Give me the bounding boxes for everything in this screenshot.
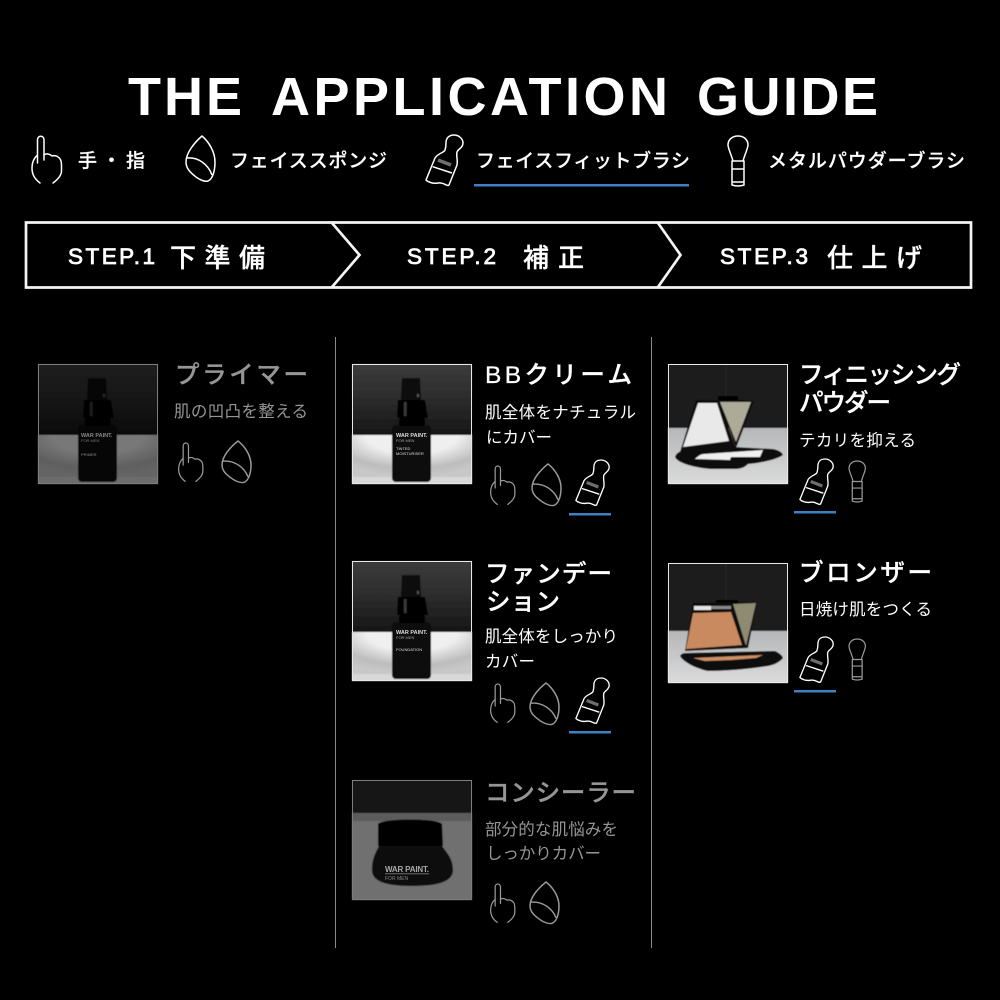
product photo: BB cream: WAR PAINT. <box>396 433 428 439</box>
panel: foundation: カバー <box>485 653 535 671</box>
icon: sponge <box>532 464 561 506</box>
panel: foundation <box>352 559 618 734</box>
product photo: primer: WAR PAINT. <box>81 433 113 439</box>
description: primer: 肌の凹凸を整える <box>174 402 308 421</box>
highlight underline <box>794 511 836 514</box>
tool legend <box>32 135 965 186</box>
icon: face fit brush <box>576 678 609 723</box>
panel: BB cream <box>352 362 636 516</box>
heading: finishing powder: フィニッシング <box>799 361 961 389</box>
panel: primer <box>38 361 308 484</box>
product photo: finishing powder <box>668 364 788 484</box>
highlight underline <box>569 731 611 734</box>
description: bronzer: 日焼け肌をつくる <box>799 600 932 619</box>
product photo: foundation <box>352 561 472 681</box>
icon: face fit brush <box>800 637 833 682</box>
icon: sponge <box>186 136 215 181</box>
product photo: BB cream: MOISTURISER <box>396 451 424 456</box>
product photo: foundation: FOR MEN <box>396 635 415 640</box>
description: finishing powder: テカリを抑える <box>799 431 916 450</box>
legend label: fingers: 手・指 <box>78 150 145 172</box>
panel: finishing powder: パウダー <box>799 389 891 417</box>
step bar <box>26 222 971 288</box>
title: GUIDE <box>697 67 878 127</box>
description: foundation: 肌全体をしっかり <box>485 627 618 646</box>
step 3 name: 仕上げ <box>827 243 922 273</box>
product photo: BB cream <box>352 364 472 484</box>
panel: concealer: しっかりカバー <box>486 845 601 863</box>
product photo: foundation: WAR PAINT. <box>396 630 428 636</box>
product photo: primer <box>38 364 158 484</box>
product photo: concealer: WAR PAINT. <box>385 865 429 874</box>
legend label: metal powder brush: メタルパウダーブラシ <box>768 149 965 172</box>
icon: hand <box>179 443 203 481</box>
product photo: BB cream: TINTED <box>396 446 411 451</box>
product photo: foundation: FOUNDATION <box>396 647 422 652</box>
panel: bronzer <box>668 559 932 692</box>
panel: finishing powder <box>668 361 961 514</box>
title <box>128 67 878 127</box>
step 2 name: 補正 <box>523 243 584 273</box>
step 1 name: 下準備 <box>170 243 265 273</box>
heading: primer: プライマー <box>175 361 308 389</box>
title: APPLICATION <box>271 67 668 127</box>
description: BB cream: 肌全体をナチュラル <box>485 403 636 422</box>
legend label: face fit brush: フェイスフィットブラシ <box>476 149 690 172</box>
highlight underline <box>569 513 611 516</box>
step 1 label: STEP.1 <box>68 244 155 269</box>
step 2 label: STEP.2 <box>407 244 496 269</box>
panel: concealer <box>352 780 636 924</box>
icon: metal powder brush <box>728 136 748 186</box>
heading: bronzer: ブロンザー <box>799 559 932 587</box>
icon: sponge <box>530 882 559 924</box>
icon: hand <box>491 884 515 922</box>
icon: face fit brush <box>426 135 463 185</box>
legend highlight underline <box>474 184 689 186</box>
step 3 label: STEP.3 <box>720 244 808 269</box>
description: concealer: 部分的な肌悩みを <box>485 820 618 839</box>
product photo: concealer <box>352 780 472 900</box>
icon: hand <box>491 466 515 504</box>
heading: foundation: ファンデー <box>485 559 612 588</box>
icon: sponge <box>530 683 559 725</box>
product photo: bronzer <box>668 563 788 683</box>
icon: metal powder brush <box>849 461 865 502</box>
icon: face fit brush <box>576 460 609 505</box>
product photo: BB cream: FOR MEN <box>396 438 415 443</box>
panel: foundation: ション <box>486 589 560 616</box>
icon: hand <box>32 136 62 183</box>
product photo: primer: FOR MEN <box>81 438 100 443</box>
highlight underline <box>794 690 836 692</box>
heading: BB cream: BBクリーム <box>485 362 632 389</box>
step bar frame with chevrons <box>26 222 971 288</box>
product photo: primer: PRIMER <box>81 452 97 457</box>
icon: sponge <box>222 441 251 483</box>
heading: concealer: コンシーラー <box>485 780 636 807</box>
product photo: concealer: FOR MEN <box>385 876 408 882</box>
icon: metal powder brush <box>849 639 865 680</box>
panel: BB cream: にカバー <box>486 429 552 447</box>
icon: hand <box>491 684 515 722</box>
legend label: sponge: フェイススポンジ <box>230 150 387 172</box>
icon: face fit brush <box>800 459 833 504</box>
title: THE <box>128 67 242 127</box>
